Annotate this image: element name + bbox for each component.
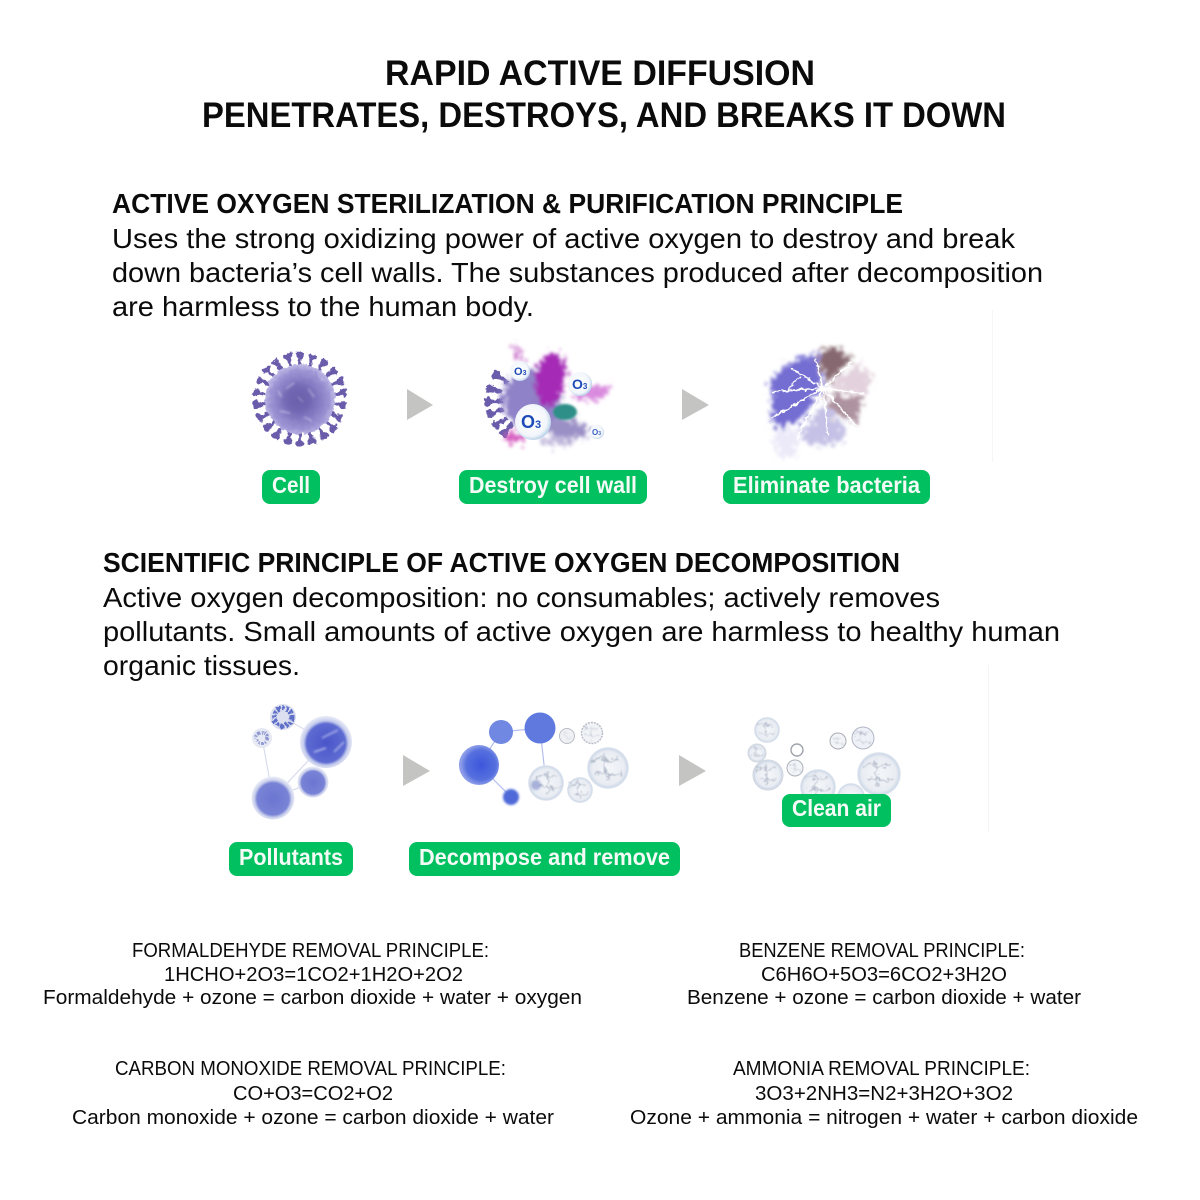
text block: sterilization description: are harmless to the human body.	[112, 291, 534, 322]
text block: benzene removal	[687, 940, 1081, 1009]
title: PENETRATES, DESTROYS, AND BREAKS IT DOWN	[202, 96, 1006, 135]
icon: virus cell	[253, 352, 347, 446]
label: Cell	[262, 470, 320, 504]
text block: ammonia removal: 3O3+2NH3=N2+3H2O+3O2	[755, 1083, 1013, 1105]
title: RAPID ACTIVE DIFFUSION	[385, 54, 815, 93]
icon: shattered bacteria	[770, 348, 872, 458]
label: Pollutants: Pollutants	[239, 844, 343, 870]
icon: pollutant molecules	[252, 704, 352, 820]
text block: decomposition description	[103, 582, 1060, 681]
text block: carbon monoxide removal: CARBON MONOXIDE REMOVAL PRINCIPLE:	[115, 1058, 506, 1080]
heading: decomposition principle: SCIENTIFIC PRINCIPLE OF ACTIVE OXYGEN DECOMPOSITION	[103, 547, 900, 578]
text block: ammonia removal: AMMONIA REMOVAL PRINCIPLE:	[733, 1058, 1030, 1080]
label: Eliminate bacteria: Eliminate bacteria	[733, 472, 920, 498]
heading: sterilization principle: ACTIVE OXYGEN STERILIZATION & PURIFICATION PRINCIPLE	[112, 188, 903, 219]
text block: formaldehyde removal: 1HCHO+2O3=1CO2+1H2O+2O2	[164, 964, 463, 986]
text block: carbon monoxide removal: CO+O3=CO2+O2	[233, 1083, 393, 1105]
text block: carbon monoxide removal	[72, 1058, 554, 1129]
icon: ozone destroying cell wall	[485, 342, 611, 446]
label: Clean air: Clean air	[792, 795, 881, 821]
label: Cell: Cell	[272, 472, 310, 498]
label: Pollutants	[229, 842, 353, 876]
text block: decomposition description: Active oxygen decomposition: no consumables; actively removes	[103, 582, 940, 613]
text block: formaldehyde removal	[43, 940, 582, 1009]
title	[202, 54, 1006, 135]
text block: decomposition description: pollutants. Small amounts of active oxygen are harmless to healthy human	[103, 616, 1060, 647]
arrow	[682, 389, 709, 420]
text block: decomposition description: organic tissues.	[103, 650, 300, 681]
text block: benzene removal: BENZENE REMOVAL PRINCIPLE:	[739, 940, 1025, 962]
ozone bubble: O3	[521, 412, 541, 432]
icon: clean air bubbles	[748, 717, 901, 811]
arrow	[407, 389, 433, 420]
decorative edge line	[988, 665, 989, 832]
text block: benzene removal: C6H6O+5O3=6CO2+3H2O	[761, 964, 1007, 986]
icon: decomposing molecules	[459, 712, 629, 805]
label: Destroy cell wall: Destroy cell wall	[469, 472, 637, 498]
text block: sterilization description: down bacteria’s cell walls. The substances produced after decomposition	[112, 257, 1043, 288]
ozone bubble: O3	[514, 366, 527, 378]
text block: formaldehyde removal: Formaldehyde + ozone = carbon dioxide + water + oxygen	[43, 987, 582, 1009]
text block: sterilization description	[112, 223, 1043, 322]
text block: formaldehyde removal: FORMALDEHYDE REMOVAL PRINCIPLE:	[132, 940, 489, 962]
arrow	[679, 755, 706, 786]
ozone bubble: O3	[592, 428, 601, 437]
label: Decompose and remove: Decompose and remove	[419, 844, 670, 870]
decorative edge line	[992, 310, 993, 462]
arrow	[403, 755, 430, 786]
text block: benzene removal: Benzene + ozone = carbon dioxide + water	[687, 987, 1081, 1009]
text block: carbon monoxide removal: Carbon monoxide + ozone = carbon dioxide + water	[72, 1107, 554, 1129]
text block: sterilization description: Uses the strong oxidizing power of active oxygen to destroy and break	[112, 223, 1016, 254]
text block: ammonia removal	[630, 1058, 1138, 1129]
text block: ammonia removal: Ozone + ammonia = nitrogen + water + carbon dioxide	[630, 1107, 1138, 1129]
ozone bubble: O3	[572, 376, 588, 392]
